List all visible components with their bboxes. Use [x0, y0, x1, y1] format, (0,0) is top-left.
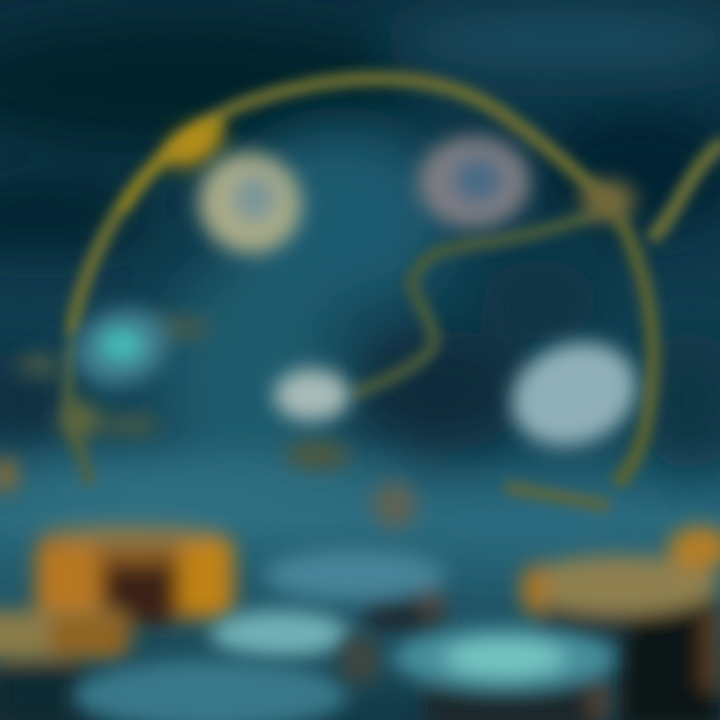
golden arc	[69, 78, 720, 505]
coin stack: lower right gold and dark	[520, 526, 720, 720]
disc: right large pale	[497, 325, 651, 463]
coin: centre teal	[265, 549, 445, 632]
disc: left cyan	[64, 295, 180, 399]
coin stack: lower left orange	[0, 525, 235, 720]
disc: top right mauve	[418, 136, 530, 228]
coin: lower right bright teal	[340, 626, 617, 720]
coin: lower centre light	[210, 610, 350, 658]
coin: lower left large teal	[72, 659, 348, 720]
disc: top left pale	[180, 134, 320, 272]
gold highlights	[0, 113, 636, 529]
disc: centre white	[274, 369, 350, 421]
